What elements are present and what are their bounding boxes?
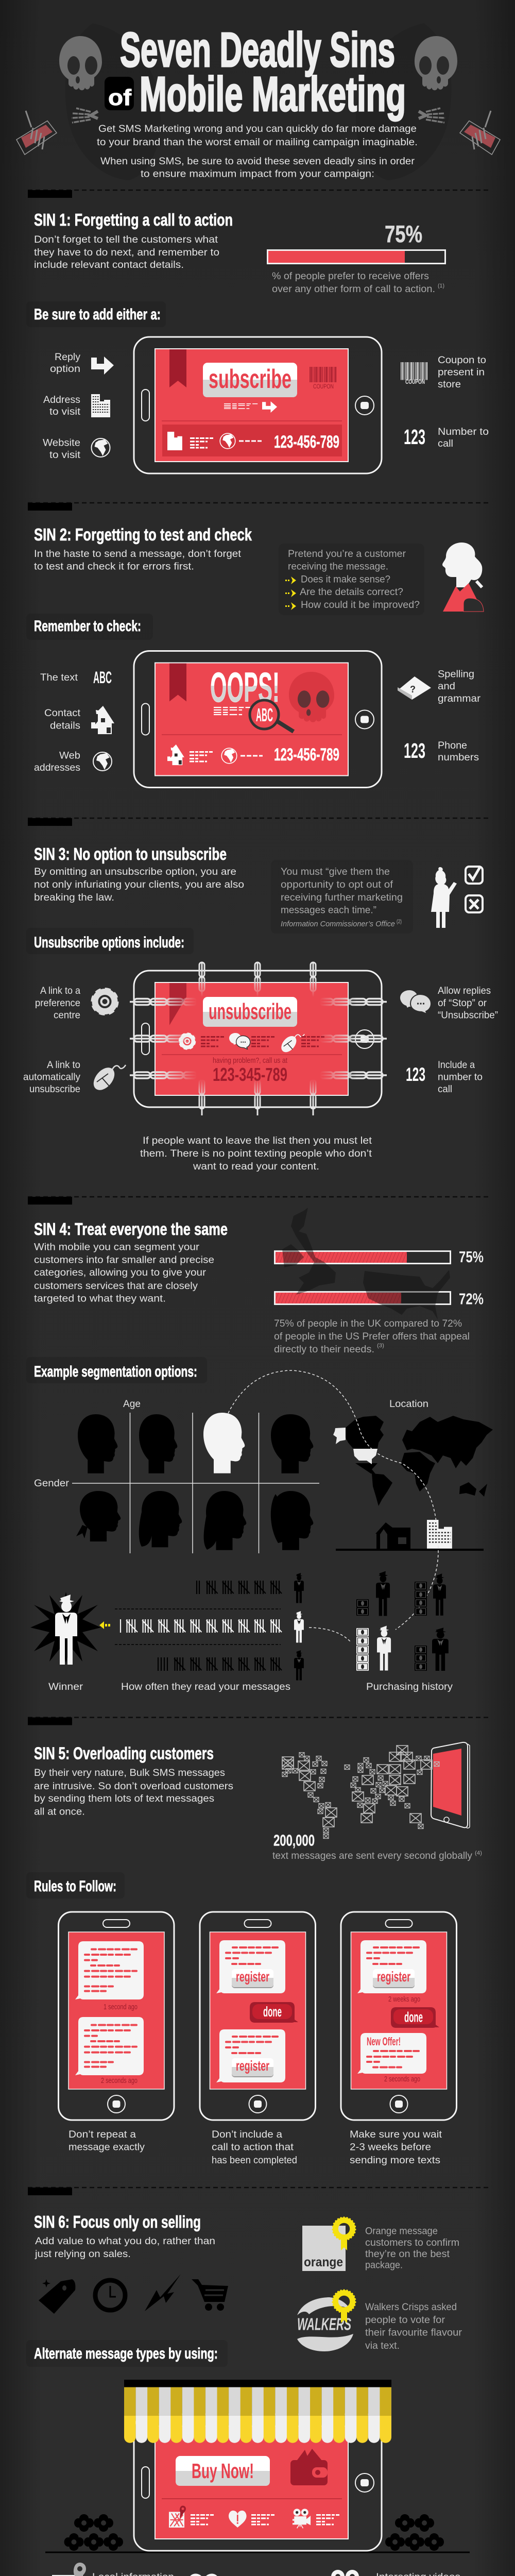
chart: how often they read your messages: [115, 1573, 304, 1692]
badge: of: [105, 77, 134, 110]
heading: sin 2: SIN 2: Forgetting to test and check: [34, 525, 252, 544]
stat: 200,000: 200,000: [273, 1831, 315, 1850]
stat: 200,000: text messages are sent every second globally: [272, 1851, 472, 1861]
unsubscribe labels left: [23, 986, 126, 1095]
check labels right: Spelling: [438, 669, 474, 680]
body text: sin 1: Don’t forget to tell the customers what: [34, 234, 218, 245]
bar chart: UK vs US: (3): [377, 1343, 384, 1349]
check labels left: [34, 668, 114, 773]
winner figure: Winner: [48, 1682, 83, 1692]
phone: subscribe: [134, 337, 382, 473]
check labels left: Contact: [44, 708, 81, 719]
icon: woman silhouette: [442, 543, 484, 612]
check labels right: ?: [410, 684, 416, 694]
body text: sin 3: [34, 867, 244, 903]
rule captions: [68, 2129, 442, 2166]
magnifier: [250, 700, 294, 732]
example: walkers: their favourite flavour: [365, 2328, 462, 2338]
body text: sin 4: [34, 1242, 214, 1304]
body text: sin 6: Add value to what you do, rather than: [35, 2236, 215, 2247]
phone: subscribe: 123-456-789: [274, 432, 339, 452]
intro text: to your brand than the worst email or mailing campaign imaginable.: [97, 137, 418, 148]
magnifier: ABC: [256, 704, 273, 725]
example: orange: customers to confirm: [365, 2238, 459, 2248]
example: walkers: Walkers Crisps asked: [365, 2302, 457, 2313]
UK map: [282, 1208, 336, 1295]
phone: wait before sending: done: [404, 2009, 423, 2025]
panel: sin 3: [23, 844, 498, 1172]
option labels right: present in: [438, 367, 485, 378]
winner figure: [30, 1592, 110, 1692]
flowers and ground: [45, 2514, 470, 2553]
body text: sin 1: they have to do next, and remember to: [34, 247, 219, 258]
option labels right: call: [438, 438, 453, 449]
option labels right: Coupon to: [438, 355, 486, 366]
panel: sin 4: [26, 1208, 493, 1692]
badge: of: of: [108, 85, 131, 110]
stat: 75 percent bar: over any other form of call to action.: [272, 284, 435, 295]
closing note: sin 3: [140, 1136, 372, 1172]
unsubscribe labels left: A link to: [47, 1060, 80, 1071]
example: orange: [302, 2217, 459, 2271]
callout: ico quote: [271, 860, 413, 934]
callout: pretend you are a customer: How could it be improved?: [301, 600, 420, 611]
check labels right: grammar: [438, 693, 481, 704]
rule captions: Don’t repeat a: [68, 2129, 136, 2140]
chart: age and gender grid of heads: Gender: [34, 1478, 70, 1489]
unsubscribe labels right: of “Stop” or: [438, 998, 487, 1009]
intro text: When using SMS, be sure to avoid these seven deadly sins in order: [100, 156, 415, 167]
rule captions: Don’t include a: [212, 2129, 282, 2140]
callout: pretend you are a customer: Pretend you’re a customer: [288, 549, 406, 560]
example: orange: orange: [304, 2255, 343, 2269]
callout: ico quote: receiving further marketing: [281, 892, 403, 903]
body text: sin 4: With mobile you can segment your: [34, 1242, 200, 1253]
icon: wallet: [290, 2449, 328, 2485]
subheading chip: remember to check: Remember to check:: [34, 618, 141, 635]
bar chart: UK vs US: 75%: [459, 1248, 484, 1266]
body text: sin 5: all at once.: [34, 1806, 85, 1818]
phone: repeat message: 2 seconds ago: [101, 2076, 138, 2085]
body text: sin 3: By omitting an unsubscribe option, you are: [34, 867, 236, 877]
callout: ico quote: messages each time.”: [281, 905, 376, 916]
subheading chip: be sure to add: Be sure to add either a:: [34, 306, 161, 323]
panel: sin 2: [26, 525, 484, 787]
example: orange: Orange message: [365, 2226, 438, 2237]
callout: pretend you are a customer: Are the details correct?: [300, 587, 403, 598]
chart: age and gender grid of heads: Age: [123, 1399, 141, 1410]
header: title and intro: [16, 23, 500, 180]
check labels left: details: [50, 720, 80, 732]
button: unsubscribe: [203, 997, 297, 1027]
phone: unsubscribe chained: 123-345-789: [213, 1064, 287, 1085]
chart: age and gender grid of heads: [34, 1399, 319, 1553]
check labels left: Web: [59, 751, 80, 761]
chart: purchasing history: [309, 1571, 453, 1692]
unsubscribe labels right: [400, 986, 498, 1095]
body text: sin 6: [35, 2236, 215, 2260]
check labels left: ABC: [93, 668, 112, 687]
heading: sin 4: SIN 4: Treat everyone the same: [34, 1219, 228, 1239]
body text: sin 3: not only infuriating your clients, you are also: [34, 879, 244, 890]
callout: pretend you are a customer: Does it make sense?: [301, 574, 390, 585]
faded skull: [289, 672, 334, 722]
intro text: to ensure maximum impact from your campaign:: [141, 169, 374, 179]
heading: sin 3: SIN 3: No option to unsubscribe: [34, 844, 227, 863]
USA map: [363, 1270, 450, 1319]
awning: [124, 2380, 391, 2443]
unsubscribe labels right: call: [438, 1084, 452, 1095]
phone: completed call to action: done: [263, 2004, 282, 2020]
callout: pretend you are a customer: receiving the message.: [288, 562, 388, 572]
check labels right: [398, 669, 481, 763]
barcode: coupon: COUPON: [313, 383, 334, 390]
bar chart: UK vs US: directly to their needs.: [274, 1344, 374, 1355]
phone: wait before sending: 2 seconds ago: [384, 2075, 420, 2083]
rule captions: message exactly: [68, 2142, 145, 2153]
option labels right: 123: [404, 425, 425, 449]
body text: sin 2: [34, 549, 242, 572]
stat: 75 percent bar: % of people prefer to receive offers: [272, 271, 429, 282]
phone: oops: [134, 651, 382, 787]
stat: 75 percent bar: 75%: [385, 221, 422, 247]
unsubscribe labels left: preference: [35, 998, 80, 1009]
intro text: [97, 124, 418, 179]
unsubscribe labels right: Allow replies: [438, 986, 491, 996]
panel: sin 1: [26, 210, 489, 473]
body text: sin 5: By their very nature, Bulk SMS messages: [34, 1768, 225, 1778]
check labels right: Phone: [438, 740, 467, 751]
phone: oops: 123-456-789: [274, 745, 339, 765]
example: walkers: via text.: [365, 2341, 400, 2351]
title: [105, 23, 406, 122]
rule captions: 2-3 weeks before: [350, 2142, 431, 2153]
heading: sin 1: SIN 1: Forgetting a call to action: [34, 210, 233, 229]
subheading chip: be sure to add: [26, 301, 166, 327]
stat: 75 percent bar: (1): [438, 283, 444, 289]
check labels right: 123: [404, 739, 425, 762]
body text: sin 5: are intrusive. So don’t overload customers: [34, 1781, 233, 1792]
barcode: coupon: [310, 375, 337, 390]
body text: sin 2: to test and check it for errors first.: [34, 562, 194, 572]
option labels right: Number to: [438, 427, 489, 437]
city block: [427, 1520, 452, 1549]
body text: sin 4: categories, allowing you to give your: [34, 1267, 207, 1278]
phone: wait before sending: New Offer!: [367, 2035, 401, 2048]
body text: sin 4: customers into far smaller and precise: [34, 1255, 214, 1266]
rule captions: has been completed: [212, 2155, 297, 2166]
subheading chip: rules: Rules to Follow:: [34, 1878, 116, 1895]
icons: tag, clock, bolt, cart: [39, 2274, 228, 2314]
world map: [346, 1416, 493, 1506]
unsubscribe labels right: number to: [438, 1072, 483, 1083]
button: unsubscribe: unsubscribe: [209, 999, 291, 1024]
heading: sin 6: SIN 6: Focus only on selling: [34, 2212, 201, 2231]
check labels left: The text: [40, 672, 78, 683]
panel: sin 6: [26, 2212, 470, 2576]
body text: sin 1: [34, 234, 219, 270]
callout: ico quote: Information Commissioner’s Office: [281, 920, 395, 928]
button: subscribe: subscribe: [209, 364, 291, 394]
unsubscribe labels left: automatically: [23, 1072, 80, 1083]
phone: oops: OOPS!: [210, 664, 280, 711]
unsubscribe labels right: “Unsubscribe”: [438, 1010, 498, 1021]
option labels left: Reply: [55, 352, 81, 363]
option labels left: Website: [43, 438, 80, 448]
stat: 200,000: (4): [475, 1850, 482, 1856]
chart: location map and buildings: Location: [389, 1399, 428, 1410]
body text: sin 5: [34, 1768, 233, 1818]
unsubscribe labels left: unsubscribe: [29, 1084, 80, 1095]
body text: sin 3: breaking the law.: [34, 892, 114, 903]
phone: wait before sending: 2 weeks ago: [388, 1995, 420, 2004]
closing note: sin 3: want to read your content.: [193, 1161, 319, 1172]
subheading chip: unsubscribe options: Unsubscribe options include:: [34, 934, 184, 951]
subheading chip: alternate message types: [26, 2340, 228, 2367]
unsubscribe labels left: A link to a: [40, 986, 80, 996]
option labels left: to visit: [49, 406, 81, 417]
subheading chip: segmentation: Example segmentation options:: [34, 1363, 197, 1380]
closing note: sin 3: If people want to leave the list then you must let: [143, 1136, 372, 1146]
body text: sin 6: just relying on sales.: [35, 2249, 131, 2260]
option labels right: COUPON: [405, 378, 425, 385]
stat: 75 percent bar: [268, 221, 445, 295]
reaper backdrop: [65, 23, 451, 180]
body text: sin 2: In the haste to send a message, don’t forget: [34, 549, 242, 560]
callout: ico quote: You must “give them the: [281, 867, 390, 877]
phone: wait before sending: [341, 1912, 456, 2120]
heading: sin 5: SIN 5: Overloading customers: [34, 1743, 214, 1763]
subheading chip: segmentation: [26, 1357, 207, 1383]
chart: location map and buildings: [228, 1370, 493, 1630]
message type captions: [52, 2563, 460, 2576]
rule captions: call to action that: [212, 2142, 294, 2153]
option labels left: [43, 352, 114, 461]
option labels right: [401, 355, 489, 449]
unsubscribe labels right: 123: [406, 1064, 425, 1085]
example: walkers: WALKERS: [297, 2314, 351, 2334]
callout: pretend you are a customer: [279, 544, 424, 615]
callout: ico quote: (2): [397, 919, 402, 925]
bar chart: UK vs US: 75% of people in the UK compared to 72%: [274, 1318, 462, 1329]
phone: completed call to action: register: [236, 2058, 269, 2074]
house: [375, 1522, 410, 1549]
check labels left: addresses: [34, 762, 80, 773]
shop phone: [45, 2380, 470, 2553]
bar chart: UK vs US: of people in the US Prefer offers that appeal: [274, 1331, 470, 1342]
example: walkers: [297, 2290, 462, 2351]
body text: sin 4: customers services that are closely: [34, 1281, 198, 1292]
chains: [130, 962, 387, 1115]
phone: completed call to action: [200, 1912, 315, 2120]
phone: unsubscribe chained: [130, 962, 387, 1115]
phone: completed call to action: register: [236, 1969, 269, 1985]
chart: purchasing history: Purchasing history: [366, 1682, 453, 1692]
rule captions: Make sure you wait: [350, 2129, 442, 2140]
unsubscribe labels left: centre: [54, 1010, 80, 1021]
chart: how often they read your messages: How often they read your messages: [121, 1682, 290, 1692]
example: orange: package.: [365, 2260, 403, 2271]
callout: ico quote: opportunity to opt out of: [281, 879, 393, 890]
intro text: Get SMS Marketing wrong and you can quickly do far more damage: [98, 124, 417, 134]
chart: envelope world map and phone: [282, 1742, 470, 1838]
stat: 200,000: [272, 1831, 482, 1861]
button: buy now: Buy Now!: [192, 2459, 254, 2483]
subheading chip: alternate message types: Alternate message types by using:: [34, 2345, 218, 2362]
subheading chip: remember to check: [26, 614, 153, 640]
body text: sin 1: include relevant contact details.: [34, 260, 184, 270]
subheading chip: rules: [26, 1872, 125, 1899]
closing note: sin 3: them. There is no point texting people who don’t: [140, 1148, 372, 1159]
rule captions: sending more texts: [350, 2155, 440, 2166]
bar chart: UK vs US: 72%: [459, 1290, 484, 1308]
body text: sin 5: by sending them lots of text messages: [34, 1793, 214, 1804]
phone: repeat message: 1 second ago: [104, 2003, 138, 2011]
button: buy now: [176, 2456, 270, 2486]
check labels right: numbers: [438, 752, 479, 763]
unsubscribe labels right: Include a: [438, 1060, 475, 1071]
decoration: left skull, hand and phone: [16, 36, 102, 155]
icon: woman and tick boxes: [431, 867, 483, 928]
dashed route arc: [228, 1370, 438, 1630]
button: subscribe: [203, 363, 297, 397]
option labels right: store: [438, 379, 461, 390]
phone: unsubscribe chained: having problem?, call us at: [213, 1056, 288, 1065]
example: walkers: people to vote for: [365, 2315, 445, 2326]
bar chart: UK vs US: [274, 1208, 484, 1355]
decoration: right skull, hand and phone: [415, 36, 500, 155]
option labels left: option: [50, 364, 80, 375]
phone: wait before sending: register: [377, 1969, 410, 1985]
panel: sin 5: [26, 1742, 482, 2166]
phone in perspective: [431, 1742, 470, 1828]
check labels right: and: [438, 681, 455, 692]
example: orange: they’re on the best: [365, 2249, 450, 2260]
phone: repeat message: [59, 1912, 174, 2120]
subheading chip: unsubscribe options: [26, 928, 194, 954]
option labels left: to visit: [49, 450, 81, 461]
body text: sin 4: targeted to what they want.: [34, 1293, 166, 1304]
option labels left: Address: [43, 395, 80, 405]
